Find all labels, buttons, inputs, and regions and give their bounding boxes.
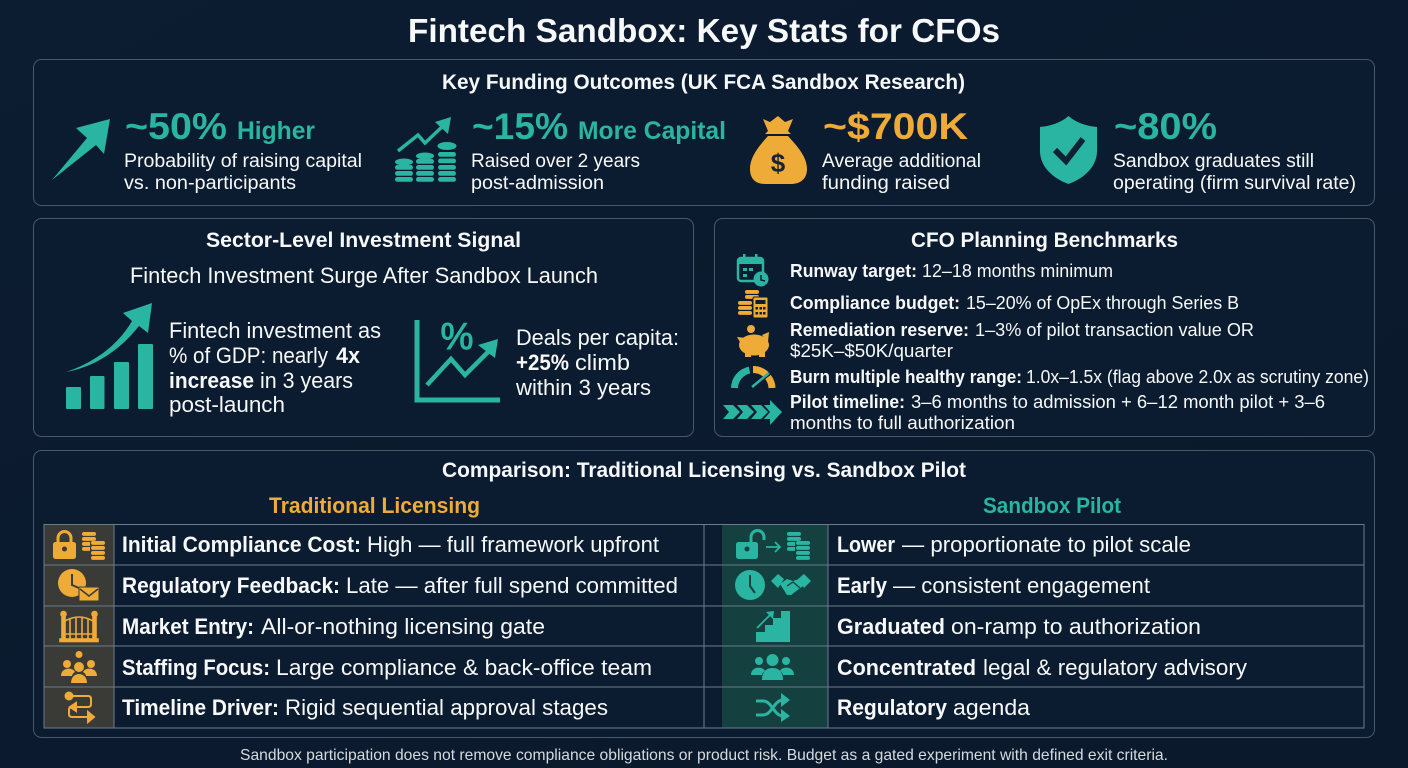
row: regulatory feedback: Late — after full spend committed <box>346 573 678 598</box>
text: runway target <box>790 261 1113 281</box>
text: deals per capita <box>515 325 679 400</box>
icon: coins and calculator <box>738 290 768 318</box>
stat: 80 percent survival: ~80% <box>1114 106 1217 147</box>
row: timeline driver: Rigid sequential approval stages <box>285 695 608 720</box>
row: lower cost <box>736 530 1191 560</box>
text: remediation reserve <box>790 320 1254 361</box>
row: timeline driver <box>66 692 608 722</box>
row: initial compliance cost: Initial Compliance Cost: <box>122 532 361 557</box>
icon: team <box>61 651 97 683</box>
row: early engagement <box>735 570 1150 600</box>
row: initial compliance cost <box>53 532 659 560</box>
icon: people <box>751 654 794 680</box>
stat: 700K additional funding: funding raised <box>822 173 950 194</box>
row: staffing focus <box>61 651 652 683</box>
panel: CFO planning benchmarks <box>714 218 1374 436</box>
icon: percent line chart <box>417 316 500 400</box>
column heading: traditional licensing: Traditional Licensing <box>269 493 480 518</box>
text: compliance budget <box>790 293 1239 313</box>
text: burn multiple: Burn multiple healthy range: <box>790 367 1022 387</box>
row: staffing focus: Large compliance & back-office team <box>276 655 652 680</box>
icon: clock and handshake <box>735 570 811 600</box>
row: regulatory feedback <box>58 569 678 601</box>
icon: bar chart with rising arrow <box>66 303 153 409</box>
row: market entry: All-or-nothing licensing gate <box>261 614 545 639</box>
stat: 700K additional funding: ~$700K <box>823 106 968 147</box>
stat: 80 percent survival: operating (firm survival rate) <box>1113 173 1356 194</box>
text: compliance budget: 15–20% of OpEx through Series B <box>966 293 1239 313</box>
text: investment as percent of GDP: Fintech investment as <box>169 318 381 343</box>
heading: CFO planning benchmarks: CFO Planning Benchmarks <box>911 229 1178 252</box>
row: regulatory agenda: Regulatory <box>837 695 948 720</box>
text: investment as percent of GDP: in 3 years <box>260 368 353 393</box>
text: runway target: 12–18 months minimum <box>922 261 1113 281</box>
heading: key funding outcomes: Key Funding Outcomes (UK FCA Sandbox Research) <box>442 71 965 94</box>
stat: 50 percent higher: vs. non-participants <box>124 173 296 194</box>
row: initial compliance cost: High — full framework upfront <box>367 532 659 557</box>
icon: calendar with clock <box>738 254 768 286</box>
title: Fintech Sandbox: Key Stats for CFOs <box>408 12 1000 49</box>
text: remediation reserve: Remediation reserve: <box>790 320 969 340</box>
text: investment as percent of GDP: 4x <box>336 343 361 368</box>
row: early engagement: Early <box>837 573 888 598</box>
text: investment as percent of GDP: post-launch <box>169 392 285 417</box>
stat: 15 percent more capital: Raised over 2 years <box>471 151 640 172</box>
stat: 50 percent higher <box>52 106 362 194</box>
text: compliance budget: Compliance budget: <box>790 293 960 313</box>
icon: open lock, arrow and coins <box>736 530 811 560</box>
row: regulatory feedback: Regulatory Feedback: <box>122 573 340 598</box>
text: remediation reserve: $25K–$50K/quarter <box>790 341 953 361</box>
column heading: sandbox pilot: Sandbox Pilot <box>983 493 1122 518</box>
row: market entry <box>60 612 545 642</box>
icon: lock and coins <box>53 532 106 560</box>
row: regulatory agenda: agenda <box>953 695 1031 720</box>
icon: rising arrow <box>52 119 110 180</box>
icon: money bag: $ <box>771 148 786 178</box>
text: burn multiple: 1.0x–1.5x (flag above 2.0x as scrutiny zone) <box>1026 367 1369 387</box>
text: investment as percent of GDP: increase <box>169 368 254 393</box>
stat: 15 percent more capital: ~15% <box>472 106 568 147</box>
icon: shield with check <box>1040 116 1097 184</box>
icon: money bag <box>750 116 807 184</box>
text: runway target: Runway target: <box>790 261 917 281</box>
text: investment as percent of GDP: % of GDP: nearly <box>169 343 328 368</box>
heading: sector-level investment signal: Sector-Level Investment Signal <box>206 229 521 252</box>
stat: 700K additional funding: Average additional <box>822 151 981 172</box>
icon: looping path arrows <box>66 692 94 722</box>
panel: comparison table <box>34 450 1374 738</box>
row: regulatory agenda <box>756 693 1031 722</box>
stat: 50 percent higher: Probability of raising capital <box>124 151 362 172</box>
stat: 50 percent higher: Higher <box>237 117 315 145</box>
icon: percent line chart: % <box>441 316 473 357</box>
text: pilot timeline: Pilot timeline: <box>790 392 905 412</box>
icon: clock and envelope <box>58 569 99 601</box>
icon: piggy bank <box>737 325 769 357</box>
text: deals per capita: climb <box>575 350 630 375</box>
row: graduated on-ramp: Graduated <box>837 614 945 639</box>
row: concentrated advisory <box>751 654 1247 680</box>
stat: 50 percent higher: ~50% <box>125 106 227 147</box>
icon: shuffle arrows <box>756 693 790 722</box>
icon: gate <box>60 612 98 642</box>
row: concentrated advisory: Concentrated <box>837 655 976 680</box>
footer note: Sandbox participation does not remove compliance obligations or product risk. Budget as a gated experiment with defined exit criteria. <box>240 747 1168 764</box>
text: burn multiple <box>790 367 1369 387</box>
icon: chevron timeline arrow <box>723 400 782 425</box>
row: concentrated advisory: legal & regulatory advisory <box>983 655 1247 680</box>
icon: coin stacks with trend line <box>395 117 456 182</box>
stat: 15 percent more capital <box>395 106 726 194</box>
row: market entry: Market Entry: <box>122 614 254 639</box>
panel: key funding outcomes <box>34 60 1374 206</box>
stat: 700K additional funding <box>750 106 981 194</box>
row: lower cost: Lower <box>837 532 895 557</box>
panel: sector-level investment signal <box>34 218 694 436</box>
row: graduated on-ramp: on-ramp to authorization <box>951 614 1201 639</box>
row: graduated on-ramp <box>756 611 1201 642</box>
subheading: investment surge: Fintech Investment Surge After Sandbox Launch <box>130 263 598 288</box>
text: deals per capita: Deals per capita: <box>516 325 679 350</box>
stat: 15 percent more capital: post-admission <box>471 173 604 194</box>
text: deals per capita: +25% <box>516 350 569 375</box>
text: deals per capita: within 3 years <box>515 375 651 400</box>
heading: comparison: Comparison: Traditional Licensing vs. Sandbox Pilot <box>442 459 966 482</box>
stat: 15 percent more capital: More Capital <box>578 117 726 145</box>
row: timeline driver: Timeline Driver: <box>122 695 279 720</box>
text: investment as percent of GDP <box>169 318 381 417</box>
text: pilot timeline: months to full authorization <box>790 413 1015 433</box>
stat: 80 percent survival: Sandbox graduates still <box>1113 151 1314 172</box>
row: early engagement: — consistent engagement <box>893 573 1150 598</box>
text: pilot timeline <box>790 392 1325 433</box>
icon: stairs with arrow <box>756 611 790 642</box>
row: lower cost: — proportionate to pilot scale <box>902 532 1191 557</box>
text: pilot timeline: 3–6 months to admission + 6–12 month pilot + 3–6 <box>911 392 1325 412</box>
stat: 80 percent survival <box>1040 106 1356 194</box>
icon: gauge <box>734 369 772 388</box>
row: staffing focus: Staffing Focus: <box>122 655 270 680</box>
text: remediation reserve: 1–3% of pilot transaction value OR <box>975 320 1254 340</box>
